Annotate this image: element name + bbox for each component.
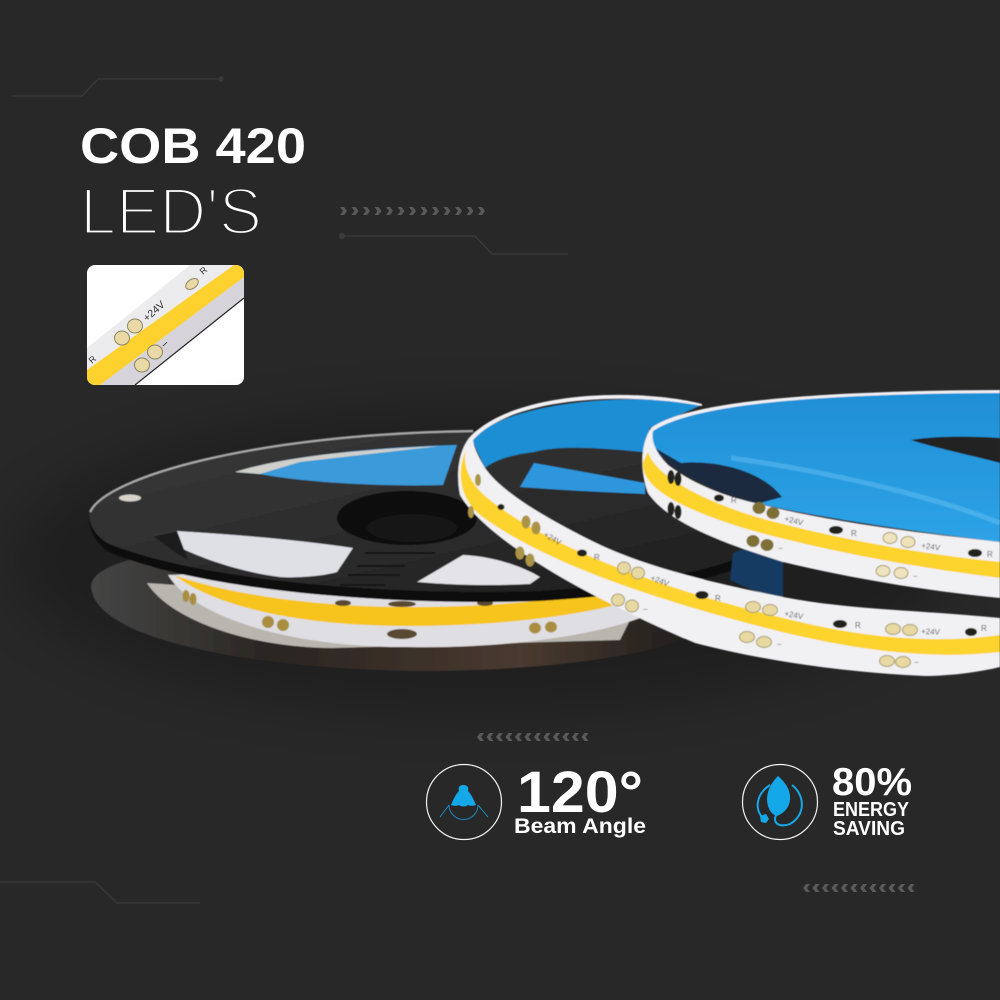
stat: beam angle: Beam Angle xyxy=(514,815,646,838)
upper window xyxy=(235,445,457,485)
thumbnail: strip close-up: R xyxy=(198,264,210,276)
thumbnail: strip close-up: R xyxy=(87,353,99,365)
lower right window xyxy=(417,555,540,585)
product photo: LED strip reel xyxy=(89,390,1000,676)
ring 2 band xyxy=(642,390,1000,598)
ring 2 markings: +24V xyxy=(921,541,941,553)
ring 2 yellow xyxy=(643,452,1000,578)
ring 1 markings: R xyxy=(715,594,721,603)
ring 1 markings: R xyxy=(855,621,861,630)
thumbnail: strip close-up: +24V xyxy=(141,299,167,324)
ring 1 band xyxy=(458,395,1000,676)
circuit line: bottom left xyxy=(0,882,200,903)
ring 2 markings: +24V xyxy=(784,514,805,528)
stat: energy saving: ENERGY xyxy=(833,799,910,821)
ring 2 markings: − xyxy=(778,544,783,553)
ring 1 markings: − xyxy=(777,640,782,649)
ring 2 blue interior xyxy=(652,392,1000,542)
stat: energy saving: 80% xyxy=(832,761,912,804)
ring 2 markings: R xyxy=(851,529,857,538)
ring 1 markings: − xyxy=(643,605,648,614)
ring 2 markings: R xyxy=(987,550,993,559)
ring 1 yellow xyxy=(461,450,1000,655)
ring 1 markings: R xyxy=(981,624,987,633)
chevrons: above beam angle xyxy=(477,733,588,741)
thumbnail: strip close-up xyxy=(87,264,244,385)
lower reel flange xyxy=(91,540,705,671)
ring 1 markings: R xyxy=(594,553,600,562)
stat: energy saving xyxy=(832,761,912,840)
ring 1 markings: − xyxy=(914,658,919,667)
center hole xyxy=(337,491,477,545)
circuit line: top left xyxy=(12,77,223,96)
lower left window xyxy=(153,531,353,577)
icon: leaf and plug xyxy=(742,764,818,840)
lower strip pads xyxy=(182,590,557,639)
title line: COB 420: COB 420 xyxy=(80,118,306,174)
ring 2 markings: R xyxy=(731,496,737,505)
ring 1 blue interior xyxy=(472,399,702,468)
ring 2 markings: − xyxy=(913,572,918,581)
ring 2 light streak xyxy=(731,458,1000,523)
ring 2 markings xyxy=(668,470,993,581)
stat: beam angle: 120° xyxy=(517,760,643,825)
lower strip xyxy=(168,570,640,647)
label ribs xyxy=(340,553,435,585)
flange rim highlight xyxy=(90,431,473,512)
lower strip yellow xyxy=(174,575,612,626)
ring 1 markings xyxy=(468,474,987,668)
chevrons: lower right xyxy=(803,884,914,892)
icon: beam angle xyxy=(426,764,502,840)
ring 1 markings: +24V xyxy=(784,609,804,621)
ring 1 markings: +24V xyxy=(542,530,563,548)
stat: energy saving: SAVING xyxy=(833,818,905,840)
ring 1 markings: +24V xyxy=(649,573,671,589)
shadow under reel xyxy=(10,410,950,710)
circuit line: middle xyxy=(340,234,568,254)
flange hole xyxy=(119,494,141,502)
ring 1 markings: +24V xyxy=(921,627,941,637)
title line: LED'S: LED'S xyxy=(80,174,262,248)
hub xyxy=(367,514,457,542)
ring 2 opening xyxy=(911,437,1000,463)
top reel flange xyxy=(89,430,783,602)
plate seen through ring 2 xyxy=(655,448,782,504)
chevrons: upper row xyxy=(340,207,485,215)
thumbnail: strip close-up: − xyxy=(159,338,172,351)
spool inner band xyxy=(147,583,630,648)
title xyxy=(80,118,306,248)
navy reflection xyxy=(730,549,783,597)
right window xyxy=(520,463,645,494)
